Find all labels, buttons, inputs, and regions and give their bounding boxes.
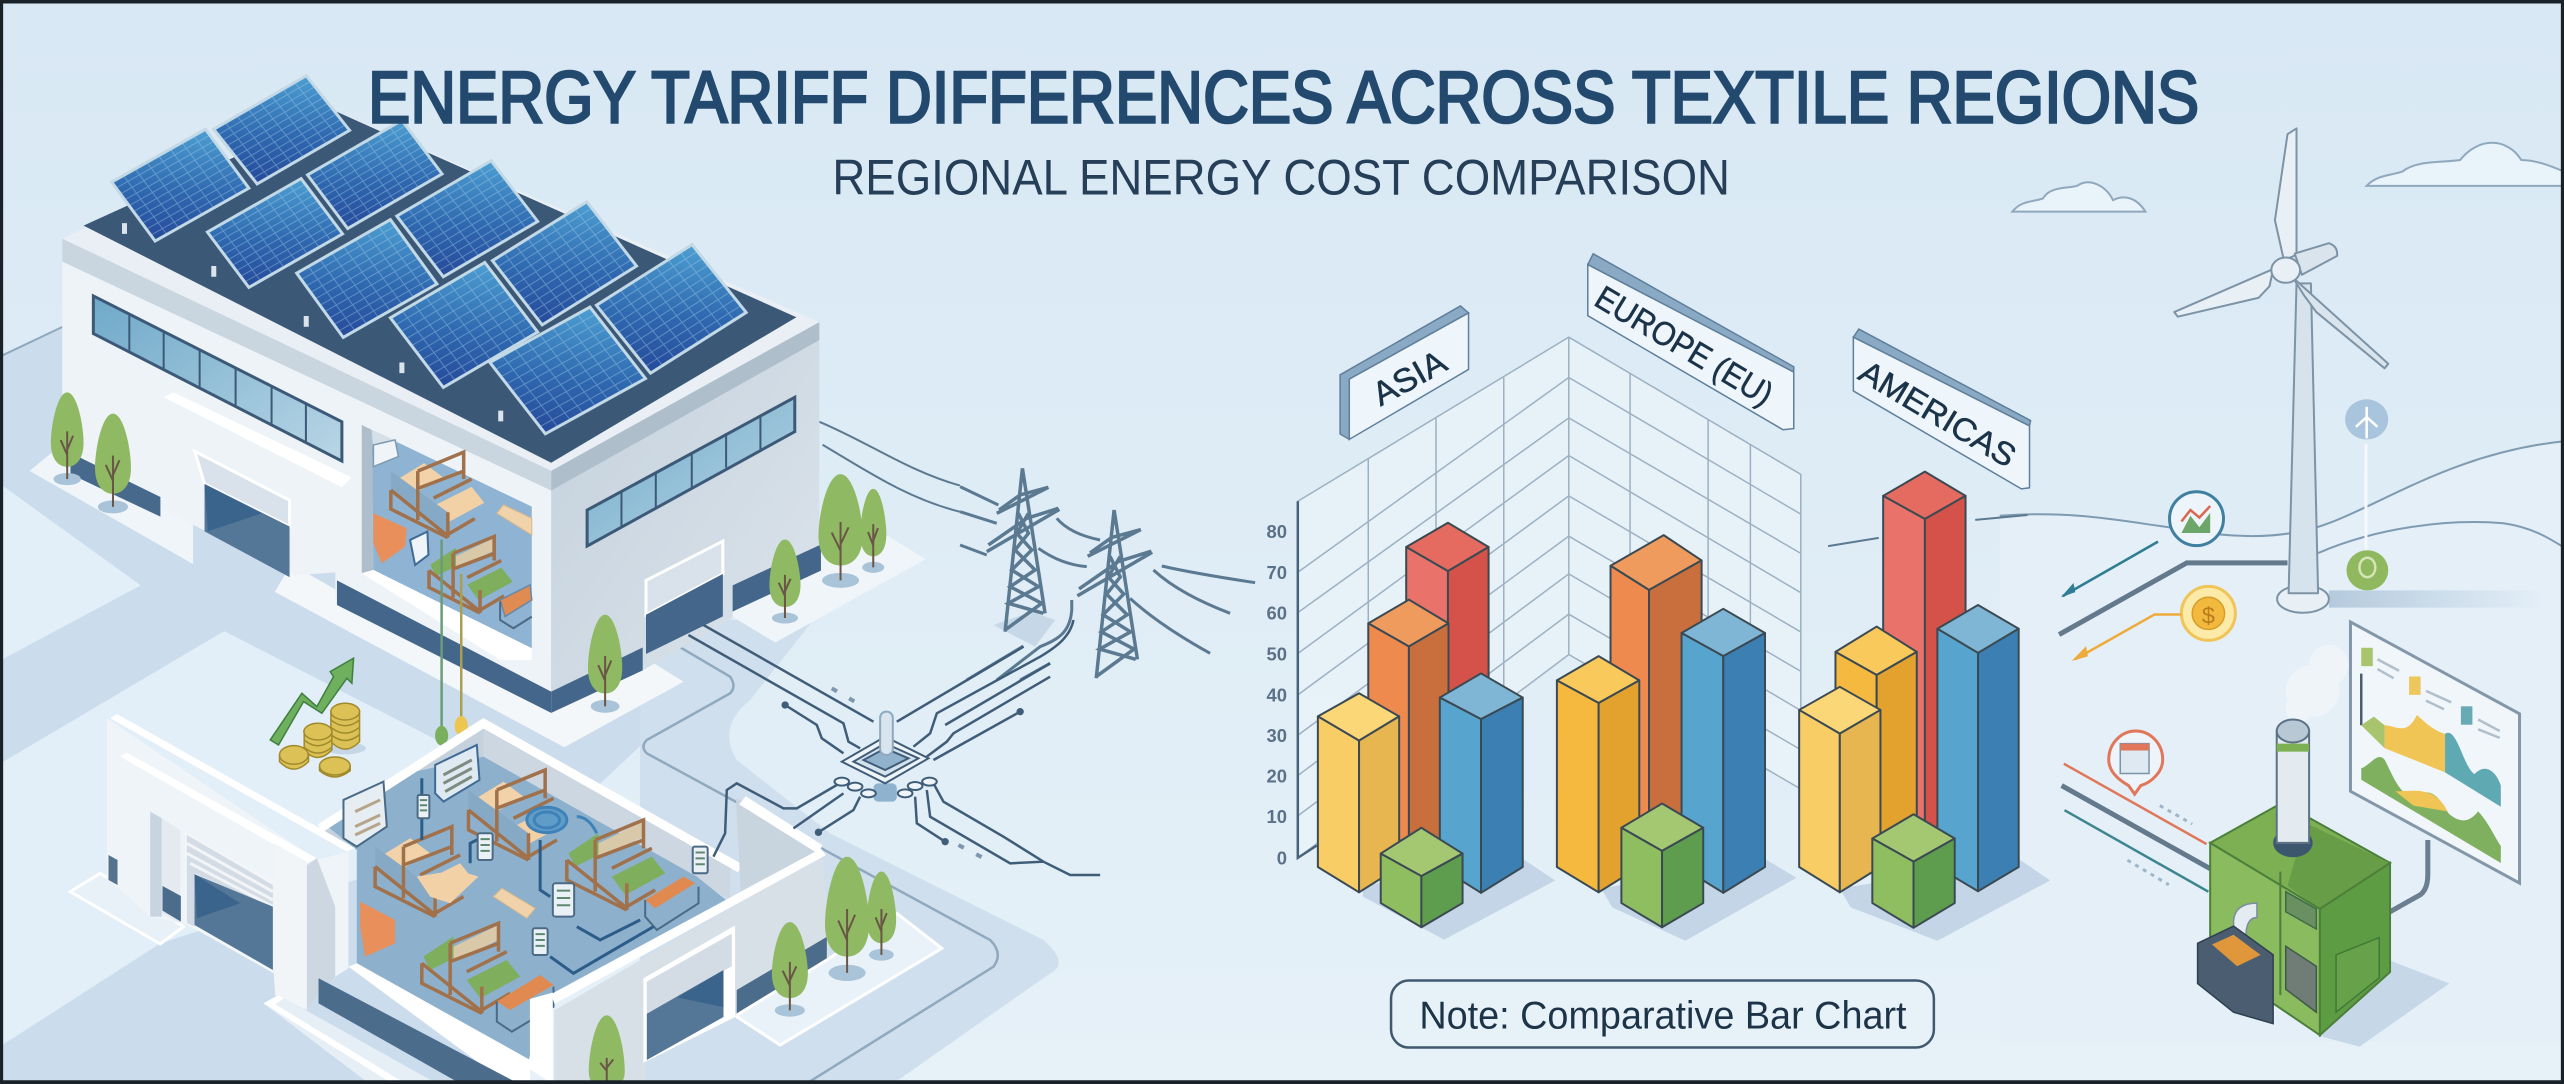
Americas: blue bar xyxy=(1937,605,2019,891)
right windows xyxy=(587,397,795,546)
room floor xyxy=(323,757,730,1060)
upper factory building xyxy=(30,111,926,747)
icon: chart circle xyxy=(2170,492,2223,546)
biomass boiler xyxy=(2210,803,2390,1035)
y axis labels: 60 xyxy=(1266,603,1287,624)
factory cutaway interior xyxy=(362,425,532,660)
white band upper xyxy=(739,796,823,853)
Asia: green bar xyxy=(1381,828,1463,927)
Americas: green bar xyxy=(1872,814,1955,928)
blue roll rings xyxy=(527,807,597,833)
dashboard panel xyxy=(2350,622,2520,883)
fabric roll xyxy=(493,888,535,918)
door frame and shutter xyxy=(185,832,274,973)
front right plinth xyxy=(737,913,942,1045)
back left wall xyxy=(320,723,483,850)
Europe: yellow bar xyxy=(1557,656,1639,892)
building plinth xyxy=(275,564,684,747)
bench 2 xyxy=(497,975,553,1032)
note box: Note: Comparative Bar Chart xyxy=(1419,993,1907,1037)
label: Americas xyxy=(1853,329,2031,489)
solar panels xyxy=(112,76,746,434)
lower factory room xyxy=(320,723,740,1083)
loom: green 1 xyxy=(567,820,665,910)
wind turbine xyxy=(2174,128,2388,613)
lower factory left wing xyxy=(70,714,518,1083)
orange shelf xyxy=(360,902,395,957)
Asia: orange bar xyxy=(1368,600,1448,843)
label: Americas: AMERICAS xyxy=(1853,353,2022,474)
note box xyxy=(1391,981,1934,1048)
Asia: blue bar xyxy=(1440,673,1523,893)
Americas: red bar xyxy=(1883,472,1966,832)
trees lower building xyxy=(772,857,896,1017)
front tree cut by page edge xyxy=(589,1015,625,1082)
Asia: red bar xyxy=(1406,523,1489,778)
y axis labels: 20 xyxy=(1266,766,1287,787)
y axis labels: 40 xyxy=(1266,684,1287,705)
meter panels xyxy=(418,795,708,955)
transformer hub and cable network xyxy=(688,620,1100,875)
loom: beige xyxy=(375,827,473,917)
background hills xyxy=(2000,441,2564,1041)
y axis labels: 80 xyxy=(1266,521,1287,542)
trees upper building xyxy=(51,392,886,713)
base plinth xyxy=(264,995,437,1083)
loom: blue-roll xyxy=(468,770,567,860)
back right wall xyxy=(483,723,730,900)
corner post xyxy=(530,992,553,1084)
pipe to dashboard xyxy=(2390,840,2428,912)
left wall xyxy=(62,239,551,713)
Americas: deep yellow bar xyxy=(1835,627,1917,843)
dark base far right xyxy=(733,544,821,611)
small window xyxy=(109,855,118,885)
dark triangle xyxy=(677,970,723,1007)
pillar 2 xyxy=(274,843,307,1010)
beige table xyxy=(417,870,478,903)
lower factory front right wall xyxy=(530,796,829,1084)
y axis labels: 30 xyxy=(1266,725,1287,746)
right plinth xyxy=(729,523,926,643)
left windows xyxy=(93,296,342,461)
chimney xyxy=(2273,720,2313,857)
back grey wall xyxy=(736,798,821,891)
fuel hopper xyxy=(2198,903,2273,1024)
parapet right face xyxy=(551,322,819,490)
recess dark xyxy=(150,812,181,923)
ground: light triangle plot xyxy=(0,484,141,661)
wall top white band xyxy=(320,723,740,868)
canopy band xyxy=(164,392,352,487)
Europe: green bar xyxy=(1621,804,1703,927)
right door xyxy=(646,541,723,654)
left plinth 2 xyxy=(70,873,184,944)
arrow: teal flow xyxy=(2061,542,2158,597)
dark strip xyxy=(737,937,827,1015)
icon: gold coin stacks xyxy=(280,703,366,777)
icon: green growth arrow xyxy=(270,658,354,745)
y axis labels: 70 xyxy=(1266,562,1287,583)
cloud left xyxy=(2012,182,2145,212)
electrical panel A xyxy=(343,782,387,847)
y axis labels: 50 xyxy=(1266,644,1287,664)
icon: green eco circle xyxy=(2347,550,2388,590)
arrow: yellow flow xyxy=(2072,615,2181,661)
Asia: yellow bar xyxy=(1318,693,1399,892)
parapet xyxy=(62,118,819,471)
ground: road around hub xyxy=(640,620,1059,1083)
wind turbine shadow xyxy=(2329,590,2545,608)
dark base xyxy=(319,978,518,1083)
dark strip behind trees xyxy=(70,453,160,517)
subtitle: REGIONAL ENERGY COST COMPARISON xyxy=(832,150,1730,206)
vertical wires between floors xyxy=(442,540,461,734)
icon: coin circle xyxy=(2181,586,2235,640)
y axis labels: 0 xyxy=(1277,847,1287,868)
shutter xyxy=(647,934,732,1014)
pylon 1 xyxy=(987,468,1059,632)
left door xyxy=(195,451,290,577)
dark base right xyxy=(551,647,643,713)
bar shadows xyxy=(1363,859,2050,941)
chart grid xyxy=(1298,337,1801,858)
comparative 3D bar chart xyxy=(1266,254,2050,941)
y axis xyxy=(1298,501,1317,858)
label: Asia: ASIA xyxy=(1366,343,1454,414)
boiler shadow xyxy=(2316,961,2449,1047)
flow lines to boiler xyxy=(2062,764,2210,892)
ground: plot behind lower building xyxy=(0,631,572,1046)
transmission pylons xyxy=(960,468,1255,680)
parapet left face xyxy=(62,239,551,490)
label: Europe: EUROPE (EU) xyxy=(1588,279,1779,414)
pillar grey xyxy=(307,858,335,1010)
icon: small wind circle xyxy=(2345,399,2388,553)
thin ground line xyxy=(0,327,62,356)
plinth white xyxy=(264,995,405,1083)
y axis labels: 10 xyxy=(1266,806,1287,827)
smoke xyxy=(2286,645,2349,724)
bench 1 xyxy=(645,877,699,930)
title: ENERGY TARIFF DIFFERENCES ACROSS TEXTILE REGIONS xyxy=(368,56,2199,139)
dark base left xyxy=(337,580,551,713)
right wall xyxy=(551,322,819,713)
ground: left road area xyxy=(0,327,703,1084)
Europe: orange bar xyxy=(1611,535,1702,843)
cloud right xyxy=(2367,143,2564,186)
door frame xyxy=(643,925,735,1063)
dark roof xyxy=(84,111,796,463)
loom: green 2 xyxy=(422,923,520,1013)
Europe: blue bar xyxy=(1682,609,1765,893)
wall top band xyxy=(551,849,826,1004)
band one xyxy=(110,714,355,852)
door opening xyxy=(195,874,273,970)
room wiring xyxy=(422,778,654,973)
renewable energy section xyxy=(2012,128,2564,1047)
Americas: light yellow bar xyxy=(1799,687,1880,892)
front sill xyxy=(348,963,530,1083)
door opening xyxy=(647,970,723,1060)
wave power lines xyxy=(819,422,2028,546)
electrical panel B xyxy=(435,745,479,802)
left plinth xyxy=(30,441,193,564)
pylon 2 xyxy=(1077,510,1152,678)
label: Asia xyxy=(1340,306,1469,439)
band two xyxy=(120,753,317,863)
wall 2 xyxy=(107,718,349,1010)
thick grid line xyxy=(2059,563,2288,635)
calendar bubble xyxy=(2109,731,2163,794)
connector markers xyxy=(435,716,468,746)
y axis labels xyxy=(1266,521,1287,868)
icon: coin circle: $ xyxy=(2202,603,2215,629)
